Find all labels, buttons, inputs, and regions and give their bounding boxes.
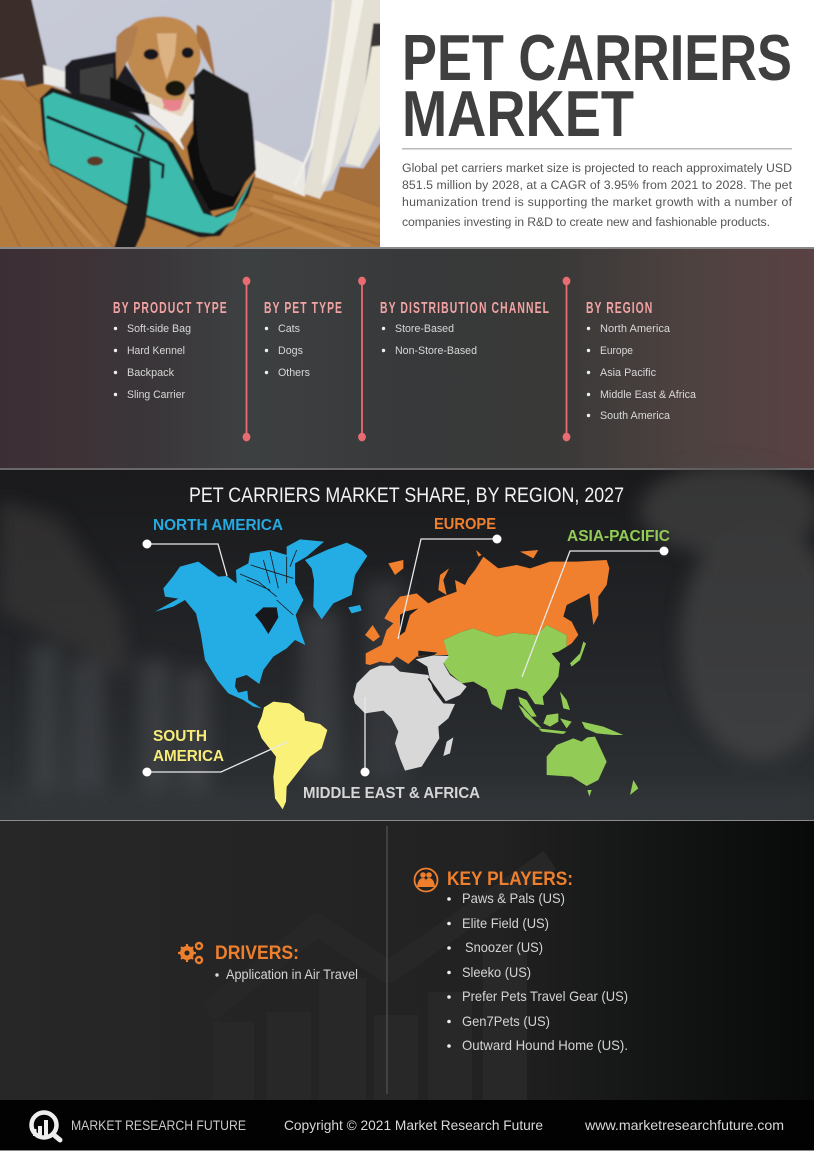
column: by product type: Backpack [127, 367, 174, 379]
column: by region: Asia Pacific [600, 367, 656, 379]
label: south america: SOUTH [153, 728, 207, 745]
intro paragraph: Global pet carriers market size is projected to reach approximately USD [402, 161, 792, 175]
column: by product type: Sling Carrier [127, 389, 185, 401]
column: by pet type [264, 299, 342, 379]
key players: Elite Field (US) [462, 915, 549, 931]
footer: Copyright © 2021 Market Research Future [284, 1117, 543, 1133]
map: europe and russia [365, 550, 609, 665]
intro paragraph: humanization trend is supporting the market growth with a number of [402, 195, 793, 209]
column: by pet type: Others [278, 367, 310, 379]
icon: magnifier logo [32, 1112, 60, 1140]
intro paragraph [402, 161, 793, 229]
key players [414, 868, 628, 1053]
icon: gears [178, 943, 202, 963]
intro paragraph: companies investing in R&D to create new and fashionable products. [402, 215, 770, 229]
label: middle east and africa: MIDDLE EAST & AFRICA [303, 785, 480, 802]
column: by region: BY REGION [586, 299, 652, 317]
panel: drivers and key players [0, 821, 814, 1100]
map: middle east and africa [353, 655, 467, 771]
key players: Outward Hound Home (US). [462, 1037, 628, 1053]
panel: regional map [0, 465, 814, 822]
column: by region: North America [600, 323, 671, 335]
key players: Sleeko (US) [462, 964, 531, 980]
column: by region: Middle East & Africa [600, 389, 697, 401]
map: asia pacific [442, 625, 638, 797]
label: south america: AMERICA [153, 748, 224, 765]
map: south america [257, 702, 327, 809]
column: by region: Europe [600, 345, 633, 357]
photo: dog in teal pet carrier [0, 0, 387, 253]
callout lines [147, 539, 664, 772]
panel: segmentation [0, 247, 814, 471]
Hudson Bay and arctic channels [255, 607, 278, 634]
label: south america [153, 728, 224, 765]
key players: Prefer Pets Travel Gear (US) [462, 988, 628, 1004]
map: north america [155, 539, 367, 708]
drivers: DRIVERS: [215, 943, 299, 964]
map title: PET CARRIERS MARKET SHARE, BY REGION, 2027 [189, 484, 624, 507]
column: by pet type: BY PET TYPE [264, 299, 342, 317]
column: by pet type: Cats [278, 323, 300, 335]
dog [148, 100, 193, 150]
column: by region [586, 299, 697, 422]
title [402, 21, 792, 150]
label: north america: NORTH AMERICA [153, 517, 283, 534]
dividers with pink dots [244, 278, 570, 440]
column: by distribution channel: Store-Based [395, 323, 454, 335]
column: by region: South America [600, 410, 671, 422]
footer: MARKET RESEARCH FUTURE [71, 1117, 246, 1133]
title: MARKET [402, 77, 634, 150]
column: by product type [113, 299, 227, 401]
teal body [40, 87, 256, 237]
label: asia pacific: ASIA-PACIFIC [567, 528, 670, 545]
column: by product type: Hard Kennel [127, 345, 185, 357]
label: europe: EUROPE [434, 516, 496, 533]
bag back [65, 52, 153, 117]
column: by product type: BY PRODUCT TYPE [113, 299, 227, 317]
intro paragraph: 851.5 million by 2028, at a CAGR of 3.95% from 2021 to 2028. The pet [402, 178, 793, 192]
column: by pet type: Dogs [278, 345, 303, 357]
footer [0, 1100, 814, 1151]
key players: Gen7Pets (US) [462, 1013, 550, 1029]
footer: www.marketresearchfuture.com [584, 1117, 784, 1133]
key players: Paws & Pals (US) [462, 890, 565, 906]
drivers: Application in Air Travel [226, 967, 358, 982]
column: by product type: Soft-side Bag [127, 323, 191, 335]
column: by distribution channel: Non-Store-Based [395, 345, 477, 357]
key players: KEY PLAYERS: [447, 869, 573, 890]
key players: Snoozer (US) [465, 939, 543, 955]
column: by distribution channel [380, 299, 549, 357]
icon: people in target [414, 868, 438, 892]
drivers [178, 943, 358, 982]
column: by distribution channel: BY DISTRIBUTION CHANNEL [380, 299, 549, 317]
